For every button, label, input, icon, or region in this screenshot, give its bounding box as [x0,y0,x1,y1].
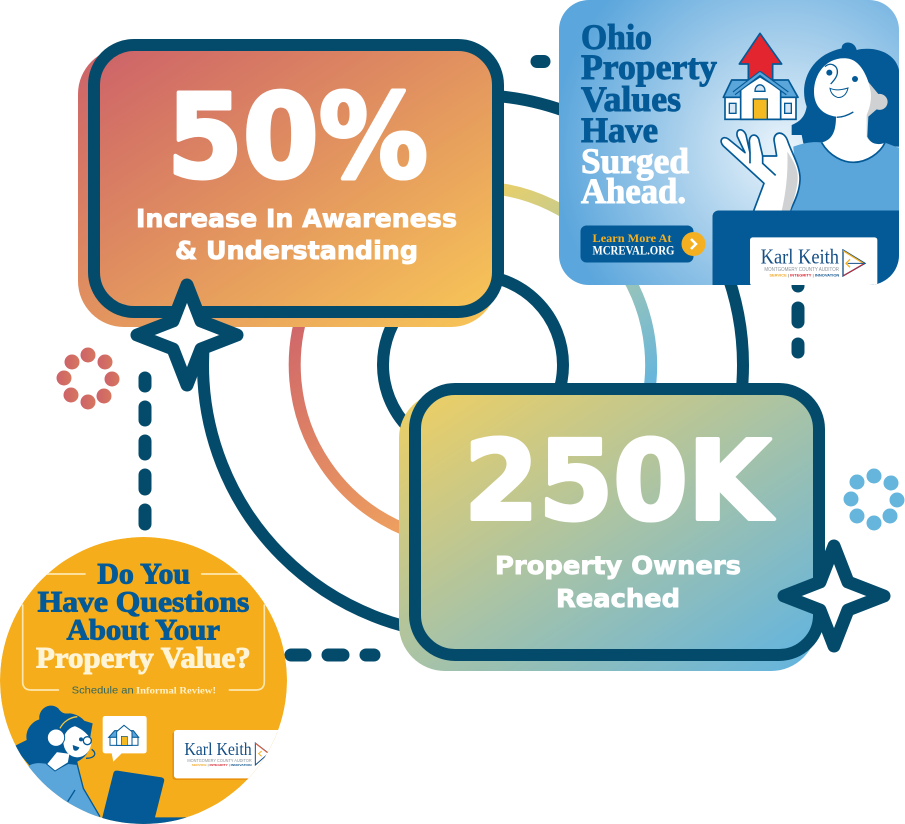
logo card: Karl Keith: Karl Keith [761,246,840,268]
house [723,80,798,97]
sub headline: Informal Review! [136,685,216,696]
hand [721,130,800,212]
ad headline: Values [581,79,681,119]
ad headline: About Your [67,615,220,647]
caption: property owners: Reached [556,584,680,613]
ad headline [581,17,717,211]
headline frame [23,574,264,690]
laptop panel [712,210,899,285]
logo card: Karl Keith: SERVICE | INTEGRITY | INNOVATION [769,273,840,277]
call to action button [580,226,706,262]
laptop [100,771,187,824]
panel: property value questions ad [0,537,291,824]
speech bubble with house [103,716,147,762]
logo card: Karl Keith: MONTGOMERY COUNTY AUDITOR [187,758,252,763]
logo card: Karl Keith [750,237,877,286]
caption: property owners [495,551,741,613]
ad headline: Have [581,110,658,150]
icon: sparkle star on 50% card [137,285,237,385]
arrow [739,33,782,80]
ad headline: Surged [581,141,689,181]
logo card: Karl Keith: SERVICE | INTEGRITY | INNOVATION [192,763,252,767]
neck shade and ear [866,82,888,143]
ad headline: Property Value? [36,643,251,675]
ad headline: Have Questions [38,587,249,619]
dashed connectors [145,62,798,655]
logo card: Karl Keith [172,730,278,780]
call to action button: Learn More At [592,231,672,245]
illustration: agent with headset at laptop [13,706,187,824]
ad headline [36,559,251,675]
sub headline [72,686,216,694]
headset [60,717,77,728]
stat: 50%: 50% [167,70,428,205]
dot ring: blue [844,468,904,530]
caption: awareness [136,204,457,265]
shirt [28,763,100,818]
panel: 50% stat card [78,45,498,327]
shirt [788,142,900,213]
face and neck [814,58,885,162]
logo card: Karl Keith: Karl Keith [184,739,252,759]
concentric ring connectors [203,95,743,635]
caption: awareness: & Understanding [175,236,418,265]
panel: Ohio property values ad [559,0,905,300]
facial features [825,64,858,117]
logo card: Karl Keith: MONTGOMERY COUNTY AUDITOR [764,267,839,273]
neck and face [47,752,70,771]
sub headline: Schedule an [72,685,134,696]
caption: awareness: Increase In Awareness [136,204,457,233]
caption: property owners: Property Owners [495,551,741,580]
hair [792,43,900,147]
panel: 250K stat card [399,389,819,671]
ad headline: Do You [97,559,190,591]
call to action button: MCREVAL.ORG [592,244,675,258]
ad headline: Ahead. [581,171,686,211]
ad headline: Property [581,47,717,87]
stat: 250K: 250K [464,417,775,545]
dot ring: red [56,348,120,410]
illustration: woman holding house [721,33,900,213]
ad headline: Ohio [581,17,652,57]
icon: sparkle star on 250K card [784,546,884,646]
hair [13,706,91,775]
